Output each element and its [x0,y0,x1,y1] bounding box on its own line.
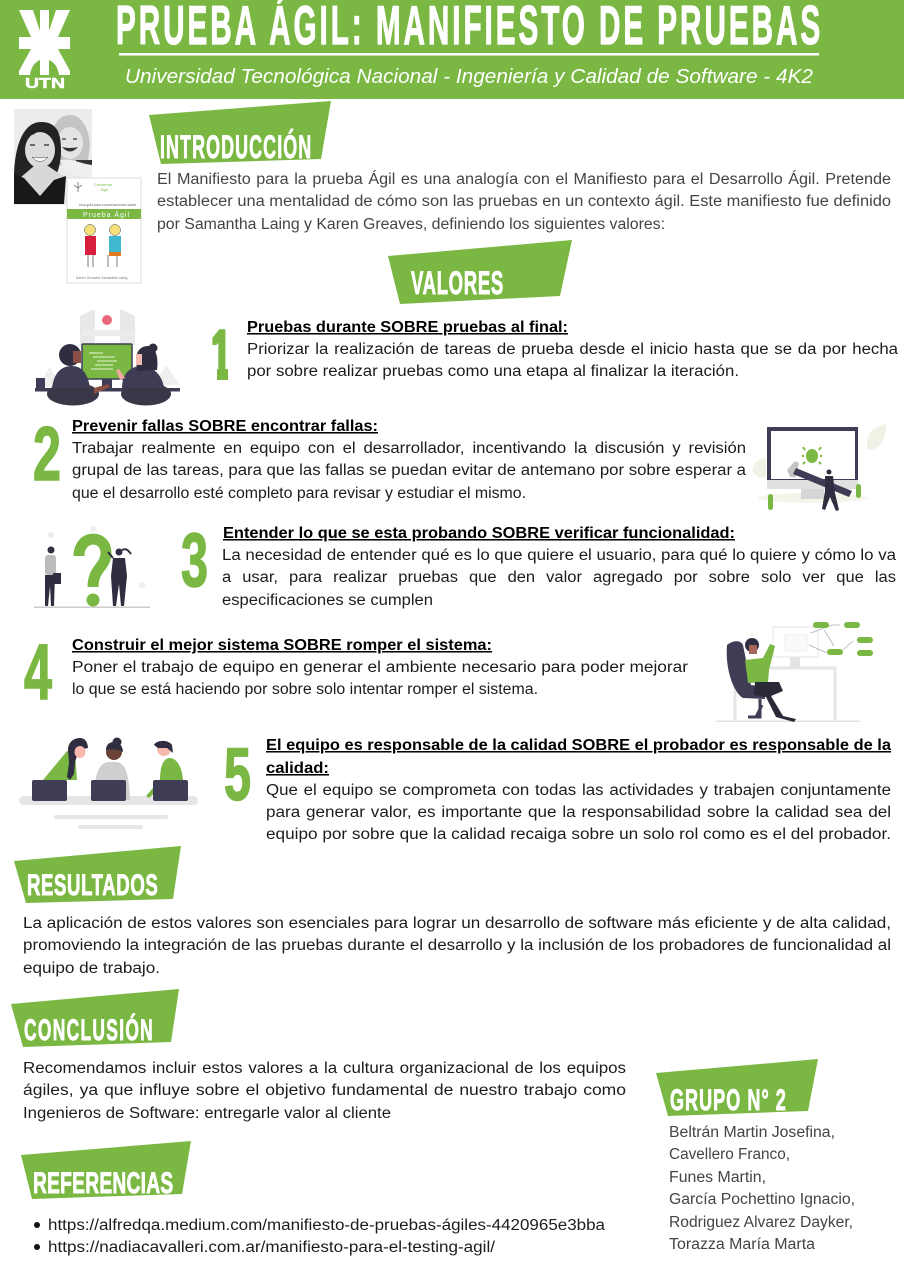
value 2 text [72,418,746,502]
value 1 text: Pruebas durante SOBRE pruebas al final: [247,319,568,336]
value 5 text: equipo por sobre que la calidad recaiga sobre un solo rol como es el del probador. [266,826,891,843]
text block: conclusión: Ingenieros de Software: entregarle valor al cliente [23,1105,391,1122]
number 2: 2 [33,412,61,497]
text block: conclusión [23,1060,626,1122]
text block: resultados [23,915,891,977]
photo: authors [14,109,92,205]
illustration: team with laptops [19,738,198,829]
text block: group members [669,1124,855,1253]
text block: resultados: equipo de trabajo. [23,960,160,977]
text block: group members: Beltrán Martin Josefina, [669,1124,835,1141]
heading: conclusión: CONCLUSIÓN [24,1013,153,1047]
heading: grupo [656,1059,818,1117]
value 2 text: Trabajar realmente en equipo con el desarrollador, incentivando la discusión y revisión [72,440,746,457]
illustration: bug on monitor with hammer [752,424,886,511]
value 5 text: El equipo es responsable de la calidad SOBRE el probador es responsable de la [266,737,891,754]
illustration: question mark with two people [34,526,150,608]
number 4: 4 [24,627,52,716]
heading: resultados [14,846,181,903]
number 5: 5 [224,733,251,816]
value 2 text: que el desarrollo esté completo para revisar y estudiar el mismo. [72,485,526,502]
value 2 text: grupal de las tareas, para que las fallas se puedan evitar de antemano por sobre esperar a [72,462,746,479]
value 3 text: Entender lo que se esta probando SOBRE verificar funcionalidad: [223,525,735,542]
text block: group members: Rodriguez Alvarez Dayker, [669,1214,853,1231]
illustration: pair working at computer [35,310,180,406]
heading: valores: VALORES [411,265,503,301]
text block: conclusión: ágiles, ya que influye sobre el objetivo fundamental de nuestro trabajo como [23,1082,626,1099]
text block: resultados: promoviendo la integración de las pruebas durante el desarrollo y la inclusión de los probadores de funcionalidad al [23,937,891,954]
heading: introducción: INTRODUCCIÓN [160,128,311,165]
number 1 [205,317,236,393]
text block: introducción: por Samantha Laing y Karen Greaves, definiendo los siguientes valores: [157,216,665,233]
number 1: 1 [211,317,231,393]
heading: conclusión [11,989,179,1047]
value 3 text [222,525,896,609]
icon: UTN logo [19,10,70,92]
value 3 text: a usar, para realizar pruebas que den valor agregado por sobre solo ver que las [222,569,896,586]
heading: resultados: RESULTADOS [27,869,158,902]
text block: group members: García Pochettino Ignacio, [669,1191,855,1208]
subtitle: Universidad Tecnológica Nacional - Ingeniería y Calidad de Software - 4K2 [125,66,813,88]
icon: UTN logo: UTN [25,75,65,92]
list: references: https://alfredqa.medium.com/manifiesto-de-pruebas-ágiles-4420965e3bba [48,1217,605,1234]
text block: introducción: El Manifiesto para la prueba Ágil es una analogía con el Manifiesto para el Desarrollo Ágil. Pretende [157,171,891,188]
book cover: Una guía para conversaciones sobre [79,203,136,207]
text block: group members: Torazza María Marta [669,1236,815,1253]
value 3 text: La necesidad de entender qué es lo que quiere el usuario, para qué lo quiere y cómo lo va [222,547,896,564]
value 4 text: Poner el trabajo de equipo en generar el ambiente necesario para poder mejorar [72,659,688,676]
header band [0,0,904,99]
heading: referencias: REFERENCIAS [33,1167,173,1200]
value 3 text: especificaciones se cumplen [222,592,433,609]
heading: introducción [149,101,331,165]
value 2 text: Prevenir fallas SOBRE encontrar fallas: [72,418,378,435]
value 5 text: calidad: [266,760,329,777]
value 5 text: para generar valor, es importante que la responsabilidad sobre la calidad sea del [266,804,891,821]
list: references: https://nadiacavalleri.com.ar/manifiesto-para-el-testing-agil/ [48,1239,496,1256]
text block: introducción: establecer una mentalidad de cómo son las pruebas en un contexto ágil. Este manifiesto fue definido [157,193,891,210]
book cover: Prueba Ágil [83,210,129,219]
value 1 text [247,319,898,380]
number 3: 3 [181,518,208,603]
book cover: Creciendo [94,182,113,187]
value 1 text: por sobre realizar pruebas como una etapa al finalizar la iteración. [247,363,739,380]
value 5 text [266,737,891,843]
book cover: Karen Greaves Samantha Laing [76,276,127,280]
list: references [34,1217,605,1256]
text block: introducción [157,171,891,233]
illustration: woman in chair with diagram [716,622,873,722]
book cover [67,178,141,283]
book cover: Ágil [101,187,108,192]
value 1 text: Priorizar la realización de tareas de prueba desde el inicio hasta que se da por hecha [247,341,898,358]
heading: referencias [21,1141,191,1200]
text block: group members: Funes Martin, [669,1169,766,1186]
heading: grupo: GRUPO N° 2 [670,1085,786,1117]
value 5 text: Que el equipo se comprometa con todas las actividades y trabajen conjuntamente [266,782,891,799]
value 4 text: lo que se está haciendo por sobre solo intentar romper el sistema. [72,681,538,698]
value 4 text: Construir el mejor sistema SOBRE romper el sistema: [72,637,492,654]
heading: valores [388,240,572,304]
text block: group members: Cavellero Franco, [669,1146,790,1163]
value 4 text [72,637,688,698]
text block: conclusión: Recomendamos incluir estos valores a la cultura organizacional de los equipos [23,1060,626,1077]
text block: resultados: La aplicación de estos valores son esenciales para lograr un desarrollo de software más eficiente y de alta calidad, [23,915,891,932]
